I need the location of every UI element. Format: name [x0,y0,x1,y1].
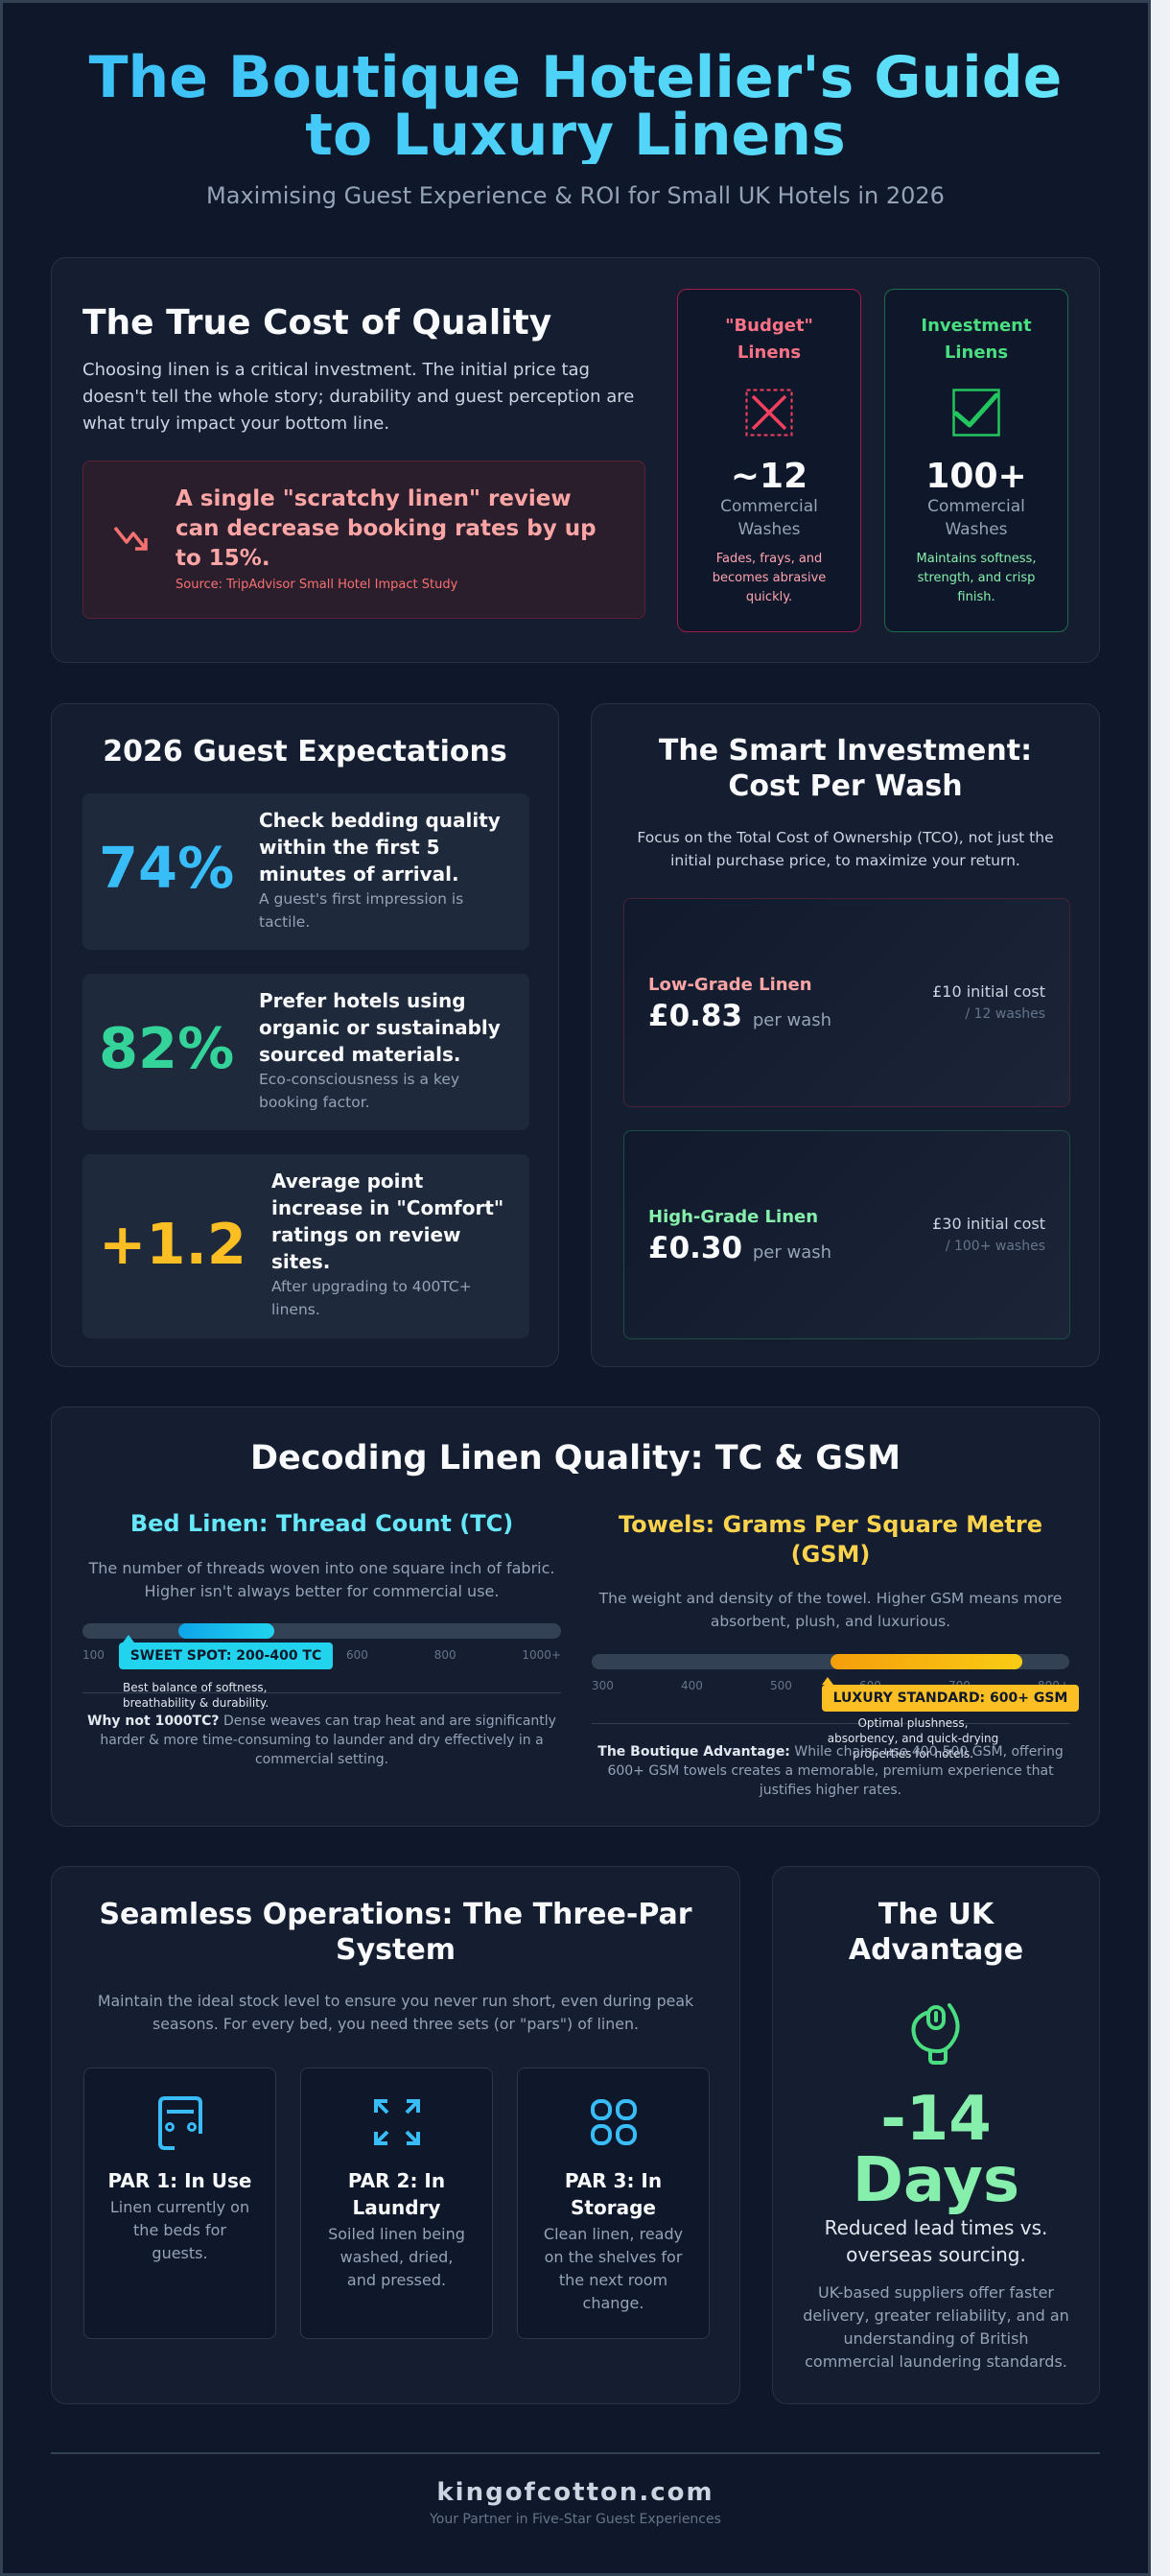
column: GSM: Optimal plushness, absorbency, and quick-drying properties for hotels. [828,1716,998,1761]
card: low grade: Low-Grade Linen [648,975,812,995]
card: par 2: Soiled linen being washed, dried, and pressed. [328,2225,465,2289]
card: high grade: / 100+ washes [946,1239,1045,1254]
heading: Decoding Linen Quality: TC & GSM [250,1439,901,1477]
icon: in use [158,2096,202,2150]
panel: UK advantage [772,1866,1100,2404]
card: par 2: Laundry [353,2196,440,2219]
card title [725,316,813,363]
card: par 1: PAR 1: In Use [108,2169,251,2192]
heading: Advantage [849,1933,1023,1967]
stat: 82%: Eco-consciousness is a key booking factor. [259,1071,459,1111]
card: investment linens: Commercial [927,497,1025,516]
intro text: Focus on the Total Cost of Ownership (TCO), not just the initial purchase price, to maximize your return. [637,829,1054,869]
panel: UK advantage: overseas sourcing. [846,2243,1026,2266]
footer: kingofcotton.com [436,2478,714,2507]
heading: The UK [878,1898,994,1931]
callout text: A single "scratchy linen" review can decrease booking rates by up to 15%. [176,486,597,571]
column: GSM: 300 [592,1679,614,1692]
callout: sweet spot [119,1642,333,1669]
icon: laundry arrows [374,2099,420,2145]
column: thread count: 800 [434,1648,456,1662]
card: budget linens: Commercial [720,497,818,516]
column: GSM: The Boutique Advantage: While chains use 400-500 GSM, offering 600+ GSM towels creates a memorable, premium experience that justifies higher rates. [597,1744,1064,1798]
intro text: Maintain the ideal stock level to ensure you never run short, even during peak seasons. For every bed, you need three sets (or "pars") of linen. [98,1992,693,2033]
card: investment linens: Washes [945,520,1008,539]
column: thread count [82,1510,561,1767]
card title: "Budget" [725,316,813,336]
icon: trending down [113,526,148,551]
card: budget linens: Fades, frays, and becomes abrasive quickly. [713,552,826,604]
column: GSM: 700 [948,1679,971,1692]
column: thread count: Why not 1000TC? Dense weaves can trap heat and are significantly harder & more time-consuming to launder and dry effectively in a commercial setting. [87,1713,556,1767]
card: high grade: £0.30 per wash [648,1231,831,1265]
stat: -14 days: Days [853,2145,1019,2216]
column: thread count: 400 [258,1648,280,1662]
heading: 2026 Guest Expectations [103,735,507,768]
column: GSM: Towels: Grams Per Square Metre (GSM) [619,1511,1042,1568]
heading: The Smart Investment: [659,734,1032,768]
panel: three-par system [51,1866,740,2404]
card: high grade: £30 initial cost [932,1215,1045,1233]
card: investment linens [884,289,1068,632]
column: thread count: 600 [346,1648,368,1662]
card: budget linens: Washes [737,520,801,539]
card: low grade: £10 initial cost [932,982,1045,1001]
stat: 100+ [925,457,1027,496]
card: par 3: Clean linen, ready on the shelves for the next room change. [544,2225,683,2312]
stat: 82%: 82% [99,1015,234,1081]
stat: 82% [82,974,529,1130]
stat: +1.2: +1.2 [99,1211,246,1277]
intro text: Choosing linen is a critical investment. The initial price tag doesn't tell the whole story; durability and guest perception are what truly impact your bottom line. [82,360,634,434]
icon: check [952,389,1000,437]
chart: TC bar [82,1623,561,1639]
stat: 74% [82,793,529,950]
stat: -14 days [853,2084,1019,2216]
callout: luxury standard [822,1685,1079,1712]
panel: true cost of quality [51,257,1100,663]
title [3,49,1148,164]
card title: Linens [737,343,801,363]
title: The Boutique Hotelier's Guide [89,44,1062,111]
heading [849,1898,1023,1967]
column: GSM: 600 [859,1679,881,1692]
card: low grade [623,898,1070,1107]
description: UK-based suppliers offer faster delivery, greater reliability, and an understanding of British commercial laundering standards. [803,2283,1069,2371]
column: GSM: 400 [681,1679,703,1692]
icon: cross [746,390,792,436]
heading [659,734,1032,803]
card: par 1: Linen currently on the beds for guests. [110,2198,249,2262]
column: GSM: 800+ [1038,1679,1069,1692]
card: low grade: / 12 washes [965,1006,1045,1022]
stat: ~12 [731,457,807,496]
card: budget linens [677,289,861,632]
column: thread count: 200 [171,1648,193,1662]
subtitle: Maximising Guest Experience & ROI for Small UK Hotels in 2026 [206,182,945,209]
card: par 1 [83,2068,276,2339]
heading: The True Cost of Quality [82,303,551,343]
heading [99,1898,692,1967]
stat: 74%: Check bedding quality within the first 5 minutes of arrival. [259,809,501,886]
stat: +1.2: Average point increase in "Comfort" ratings on review sites. [271,1170,503,1273]
column: thread count: 100 [82,1648,105,1662]
card: low grade: £0.83 per wash [648,999,831,1033]
panel: TC & GSM [51,1406,1100,1827]
chart: GSM bar [592,1654,1069,1669]
column: thread count: Bed Linen: Thread Count (TC) [130,1510,513,1537]
card title [921,316,1032,363]
card title: Linens [945,343,1008,363]
stat: 82%: Prefer hotels using organic or sustainably sourced materials. [259,989,501,1066]
column: thread count: Best balance of softness, breathability & durability. [123,1681,269,1710]
source: Source: TripAdvisor Small Hotel Impact Study [176,578,457,592]
card: par 2 [300,2068,493,2339]
stat: 74%: A guest's first impression is tactile. [259,890,463,931]
card: high grade [623,1130,1070,1339]
stat: +1.2 [82,1154,529,1338]
card: par 3: PAR 3: In [565,2169,662,2192]
heading: Cost Per Wash [728,769,963,803]
card: par 2: PAR 2: In [348,2169,445,2192]
card: par 3: Storage [571,2196,656,2219]
panel: cost per wash [591,703,1100,1367]
callout: luxury standard: LUXURY STANDARD: 600+ GSM [833,1690,1067,1706]
panel: guest expectations [51,703,559,1367]
card: par 3 [517,2068,710,2339]
stat: -14 days: -14 [880,2084,992,2155]
card: high grade: High-Grade Linen [648,1207,818,1227]
title: to Luxury Linens [305,102,846,169]
heading: Seamless Operations: The Three-Par [99,1898,692,1931]
panel: UK advantage: Reduced lead times vs. [825,2216,1047,2239]
callout: scratchy review [82,461,645,619]
column: GSM: 500 [770,1679,792,1692]
callout: sweet spot: SWEET SPOT: 200-400 TC [130,1648,321,1664]
card title: Investment [921,316,1032,336]
footer: Your Partner in Five-Star Guest Experiences [430,2512,721,2527]
icon: storage grid [591,2099,637,2145]
footer [430,2478,721,2527]
icon: uk advantage [911,2003,960,2065]
stat: +1.2: After upgrading to 400TC+ linens. [271,1278,472,1318]
column: GSM: The weight and density of the towel. Higher GSM means more absorbent, plush, and luxurious. [599,1590,1062,1630]
heading: System [336,1933,456,1967]
card: investment linens: Maintains softness, strength, and crisp finish. [917,552,1036,604]
column: thread count: The number of threads woven into one square inch of fabric. Higher isn't always better for commercial use. [89,1559,554,1600]
column: GSM [592,1511,1079,1798]
column: thread count: 1000+ [522,1648,561,1662]
stat: 74%: 74% [99,835,234,901]
